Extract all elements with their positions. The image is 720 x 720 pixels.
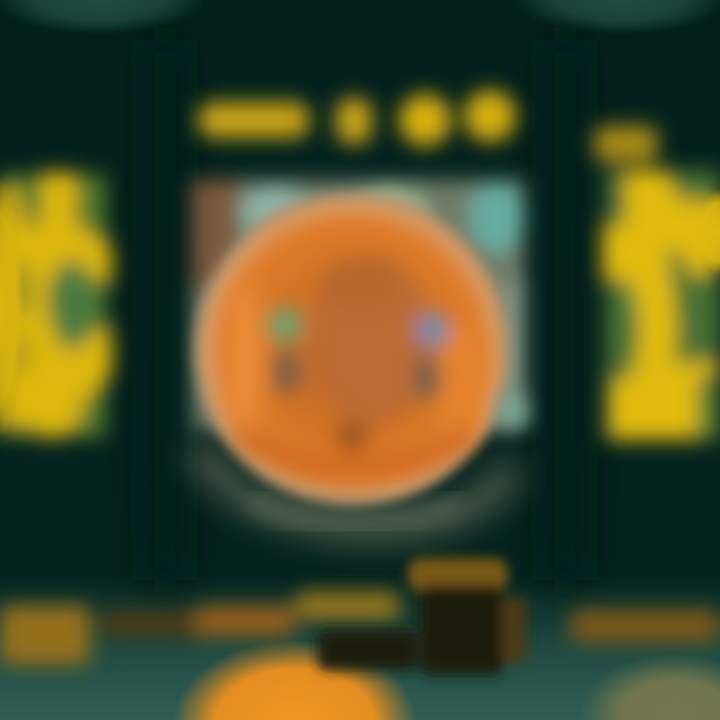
top glow arcs — [0, 0, 720, 36]
heading: blurred yellow title — [198, 90, 516, 146]
left panel: yellow coin pattern — [0, 172, 112, 440]
central panel — [192, 180, 528, 529]
table: orange and yellow foreground — [0, 592, 720, 720]
coin disc — [194, 192, 510, 508]
dark pillars — [150, 40, 580, 580]
panel backdrop tiles — [192, 180, 525, 430]
coin inner detail — [227, 255, 528, 468]
right panel: yellow coin pattern — [595, 126, 720, 440]
central dark object on table — [318, 558, 526, 675]
coin lower shadow ring — [198, 445, 512, 529]
